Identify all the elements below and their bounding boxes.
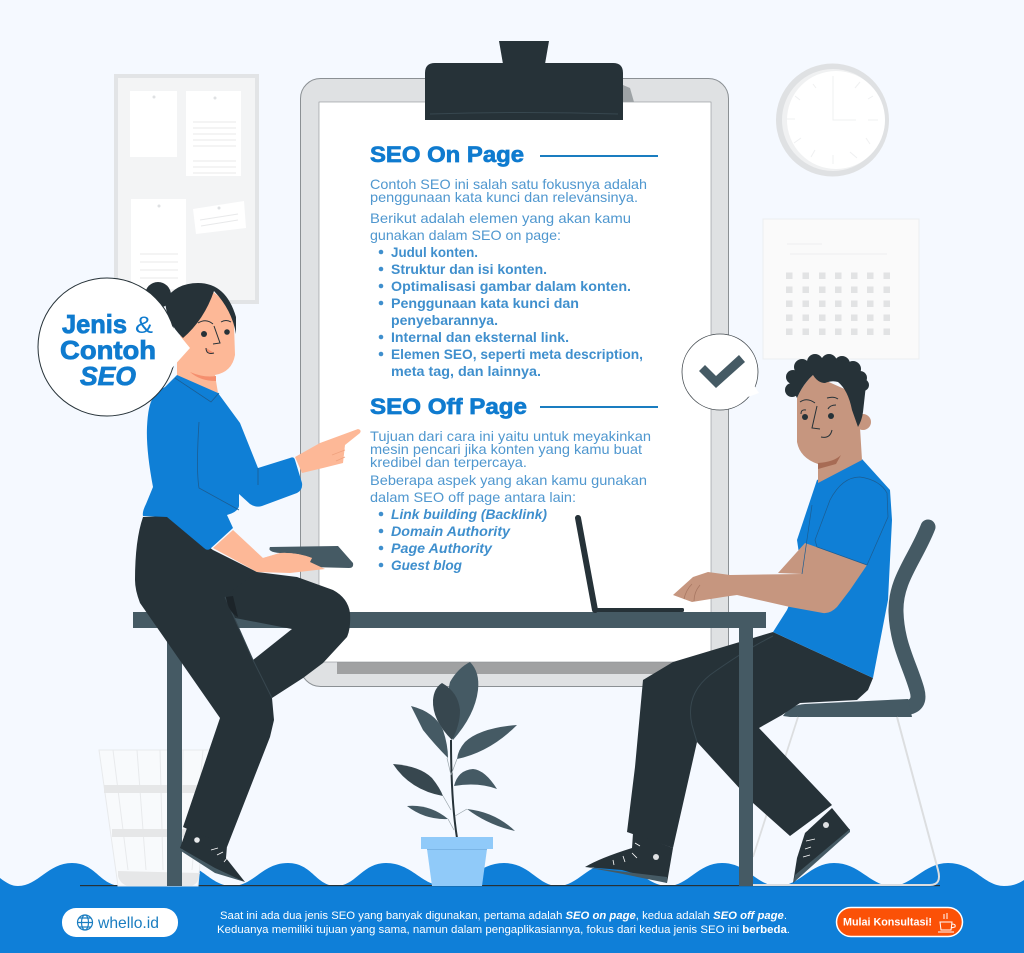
man far shoe (793, 808, 850, 883)
footer: description text: Keduanya memiliki tujuan yang sama, namun dalam pengaplikasiannya, fokus dari kedua jenis SEO ini berbeda. (217, 924, 790, 936)
speech bubble: Jenis & Contoh SEO (38, 278, 190, 416)
cork board (116, 76, 257, 302)
woman front leg (135, 516, 274, 847)
footer: consult button (836, 908, 962, 936)
woman neck and face (177, 292, 235, 393)
text block: SEO On Page: Penggunaan kata kunci dan (391, 295, 579, 311)
text block: SEO Off Page: Tujuan dari cara ini yaitu untuk meyakinkan (370, 428, 651, 444)
woman pointing arm (295, 429, 361, 473)
footer: consult button: Mulai Konsultasi! (843, 916, 932, 928)
man facial features (800, 397, 838, 437)
text block: SEO On Page (370, 142, 658, 379)
speech bubble: check mark (682, 334, 759, 410)
text block: SEO Off Page (370, 394, 658, 573)
woman shirt (143, 375, 302, 550)
text block: SEO Off Page: Link building (Backlink) (391, 506, 547, 522)
woman shoe (180, 828, 245, 882)
text block: SEO On Page: Contoh SEO ini salah satu fokusnya adalah (370, 176, 647, 192)
footer: description text (217, 910, 790, 936)
woman hand on tablet (257, 553, 325, 573)
text block: SEO Off Page: Guest blog (391, 557, 462, 573)
woman hair (145, 282, 236, 338)
text block: SEO Off Page: Domain Authority (391, 523, 511, 539)
text block: SEO On Page: Optimalisasi gambar dalam konten. (391, 278, 631, 294)
waste bin (99, 750, 210, 886)
desk right leg (739, 628, 753, 886)
woman pointing hand detail (332, 450, 345, 461)
person: man at laptop (585, 354, 892, 883)
clipboard (300, 41, 728, 686)
man near shoe (585, 833, 673, 883)
woman lower arm (213, 530, 325, 572)
speech bubble: Jenis & Contoh SEO: SEO (80, 361, 136, 391)
plant pot (421, 837, 493, 886)
man neck and face (797, 375, 862, 483)
man shirt (773, 459, 892, 678)
woman facial features (198, 320, 231, 353)
text block: SEO On Page: Judul konten. (391, 244, 478, 260)
text block: SEO Off Page: dalam SEO off page antara lain: (370, 489, 576, 505)
text block: SEO On Page: Berikut adalah elemen yang akan kamu (370, 210, 631, 226)
text block: SEO On Page: Internal dan eksternal link. (391, 329, 569, 345)
icon: check mark (699, 355, 745, 388)
heading: SEO Off Page: SEO Off Page (370, 394, 527, 419)
speech bubble: Jenis & Contoh SEO: Jenis (62, 309, 127, 339)
clipboard clip (425, 41, 634, 120)
speech bubble: Jenis & Contoh SEO: Contoh (60, 335, 156, 365)
laptop (578, 518, 684, 612)
text block: SEO Off Page: kredibel dan terpercaya. (370, 454, 527, 470)
heading: SEO On Page: SEO On Page (370, 142, 524, 167)
footer: brand pill: whello.id (97, 915, 159, 932)
man curly hair (785, 354, 869, 427)
chair (753, 527, 939, 885)
text block: SEO On Page: meta tag, dan lainnya. (391, 363, 541, 379)
wall calendar (763, 219, 919, 359)
man arm (673, 543, 867, 613)
text block: SEO Off Page: Beberapa aspek yang akan kamu gunakan (370, 472, 647, 488)
text block: SEO On Page: penggunaan kata kunci dan relevansinya. (370, 189, 638, 205)
text block: SEO Off Page: Page Authority (391, 540, 493, 556)
footer wave band (0, 863, 1024, 953)
icon: globe (78, 915, 92, 930)
text block: SEO On Page: Elemen SEO, seperti meta description, (391, 346, 643, 362)
text block: SEO On Page: gunakan dalam SEO on page: (370, 227, 561, 243)
person: woman pointing (135, 282, 361, 882)
text block: SEO Off Page: mesin pencari jika konten yang kamu buat (370, 441, 642, 457)
woman back leg (225, 572, 350, 698)
man ear (855, 414, 871, 430)
desk (133, 612, 766, 886)
footer: description text: Saat ini ada dua jenis SEO yang banyak digunakan, pertama adalah SEO on page, kedua adalah SEO off page. (220, 910, 787, 922)
man sleeve (815, 477, 888, 565)
potted plant (393, 662, 517, 886)
text block: SEO On Page: Struktur dan isi konten. (391, 261, 547, 277)
woman tablet (269, 546, 353, 568)
man far leg and near leg (627, 632, 873, 848)
text block: SEO On Page: penyebarannya. (391, 312, 498, 328)
icon: coffee cup (938, 913, 955, 932)
footer: brand pill (62, 908, 178, 937)
wall clock (776, 64, 889, 176)
speech bubble: Jenis & Contoh SEO: & (135, 312, 153, 339)
